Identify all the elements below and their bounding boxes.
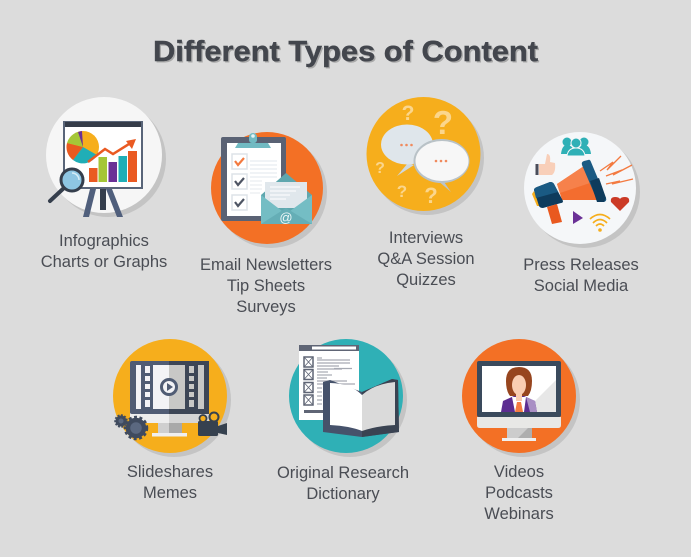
label: videos: Webinars: [484, 505, 554, 523]
icon: speech bubbles and question marks: ?: [375, 160, 385, 177]
icon: monitor with film strip, gears and camera: [113, 339, 231, 457]
icon: speech bubbles and question marks: ?: [397, 182, 407, 201]
label: videos: Podcasts: [485, 484, 553, 502]
title: Different Types of Content: [153, 36, 538, 68]
icon: clipboard and envelope: @: [279, 210, 293, 225]
panel: slideshares: [113, 339, 231, 502]
label: email newsletters: Surveys: [236, 298, 296, 316]
panel: original research: [277, 339, 409, 503]
icon: speech bubbles and question marks: ?: [424, 183, 438, 208]
icon: speech bubbles and question marks: ?: [433, 104, 453, 141]
panel: press releases: [523, 132, 640, 295]
label: infographics: Infographics: [59, 232, 149, 250]
label: original research: Original Research: [277, 464, 409, 482]
label: interviews: Interviews: [389, 229, 463, 247]
icon: megaphone with social symbols: [524, 132, 640, 248]
icon: speech bubbles and question marks: [366, 97, 484, 215]
icon: presentation board with charts: [46, 97, 166, 217]
icon: speech bubbles and question marks: ?: [402, 102, 414, 125]
label: email newsletters: Tip Sheets: [227, 277, 305, 295]
label: videos: Videos: [494, 463, 544, 481]
label: infographics: Charts or Graphs: [41, 253, 167, 271]
icon: document and open book: [289, 339, 407, 457]
label: email newsletters: Email Newsletters: [200, 256, 332, 274]
title: Different Types of Content: [154, 38, 540, 70]
panel: infographics: [41, 97, 167, 271]
label: interviews: Quizzes: [396, 271, 456, 289]
label: press releases: Press Releases: [523, 256, 639, 274]
panel: email newsletters: [200, 132, 332, 316]
label: slideshares: Memes: [143, 484, 197, 502]
icon: monitor with presenter: [462, 339, 580, 457]
label: slideshares: Slideshares: [127, 463, 213, 481]
panel: videos: [462, 339, 580, 523]
label: interviews: Q&A Session: [377, 250, 475, 268]
label: press releases: Social Media: [534, 277, 629, 295]
icon: clipboard and envelope: [211, 132, 327, 248]
label: original research: Dictionary: [306, 485, 380, 503]
panel: interviews: [366, 97, 484, 289]
